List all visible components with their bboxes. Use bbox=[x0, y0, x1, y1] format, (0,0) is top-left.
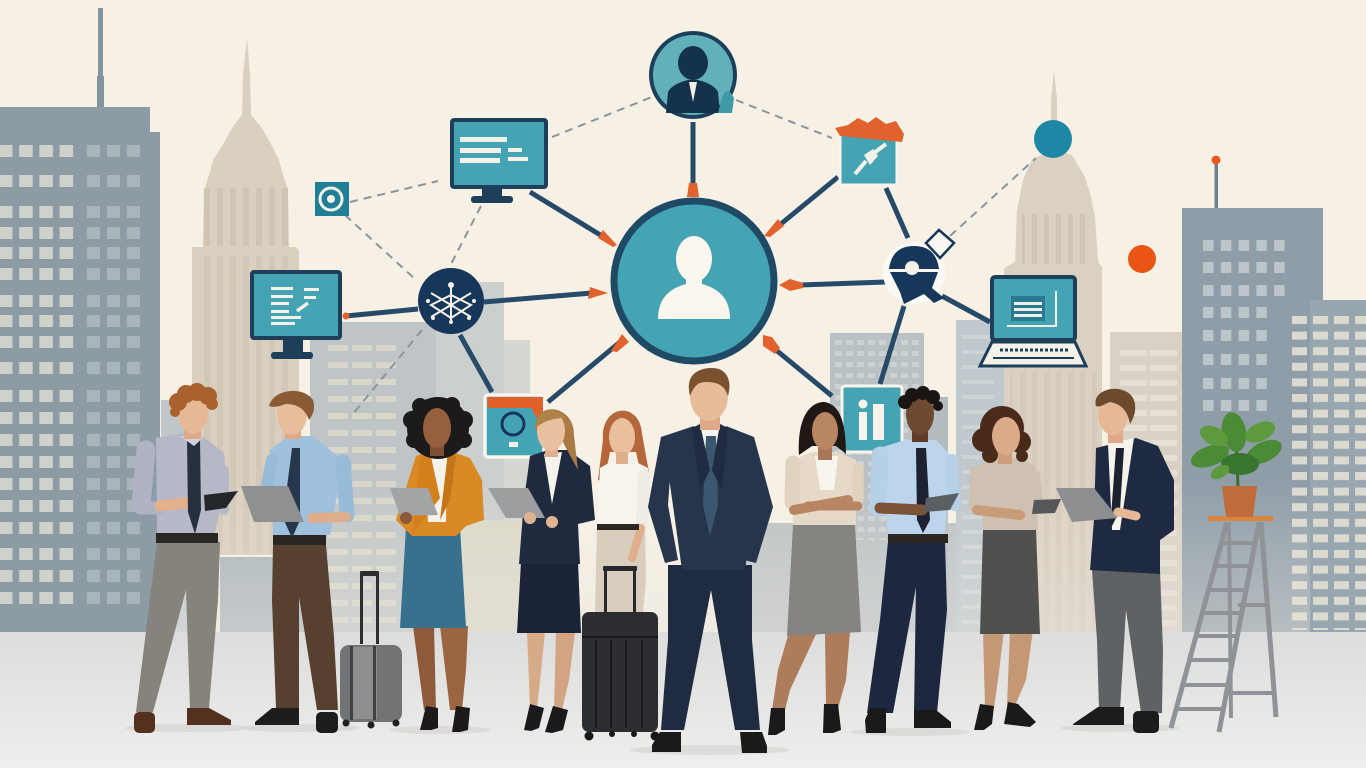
person 4: blonde, dark blazer, navy skirt bbox=[488, 409, 595, 733]
floating dots bbox=[1034, 120, 1156, 273]
arrow tips bbox=[342, 183, 803, 354]
person 10: navy blazer, grey trousers, laptop bbox=[1056, 389, 1174, 733]
icon: upper left monitor bbox=[452, 120, 546, 203]
network connectors bbox=[345, 97, 1036, 415]
person 9: curly hair, beige blouse, grey skirt bbox=[972, 406, 1061, 730]
small grey suitcase bbox=[340, 571, 402, 728]
icon: left monitor bbox=[252, 272, 340, 359]
floor shadows bbox=[125, 724, 1180, 755]
ladder bbox=[1171, 516, 1276, 732]
central hub icon bbox=[614, 201, 774, 361]
person 8: light blue shirt, navy trousers bbox=[865, 386, 959, 733]
person 5: red hair, white blouse, beige trousers bbox=[595, 411, 650, 612]
skyline: pale centre buildings bbox=[161, 282, 1004, 633]
icon: snowflake node bbox=[418, 268, 484, 334]
floor bbox=[0, 632, 1366, 768]
skyline: right grey buildings bbox=[1110, 156, 1366, 633]
icon: gear and wrench node bbox=[883, 230, 954, 304]
icon: top person badge bbox=[651, 33, 735, 117]
icon: lower right bar chart card bbox=[842, 386, 902, 452]
large black suitcase bbox=[582, 566, 660, 740]
icon: upper right plug card bbox=[835, 117, 904, 185]
person 3: afro hair, orange blazer, teal skirt bbox=[390, 397, 484, 732]
person 2: blue shirt, brown trousers, laptop bbox=[241, 391, 347, 733]
icon: small target bbox=[315, 182, 349, 216]
icon: laptop bbox=[980, 277, 1086, 366]
person 6: central man in navy suit bbox=[648, 368, 773, 753]
skyline: left tan tower bbox=[192, 37, 299, 555]
icon: lower left orange-tabbed card bbox=[485, 395, 544, 457]
person 7: dark hair, beige blouse, grey skirt bbox=[768, 402, 861, 735]
person 1: curly red hair, grey shirt bbox=[134, 383, 238, 733]
potted plant bbox=[1188, 410, 1285, 517]
skyline: right tan tower bbox=[1004, 70, 1102, 632]
haze over skyline base bbox=[160, 480, 1310, 633]
skyline: left dark building bbox=[0, 8, 160, 633]
